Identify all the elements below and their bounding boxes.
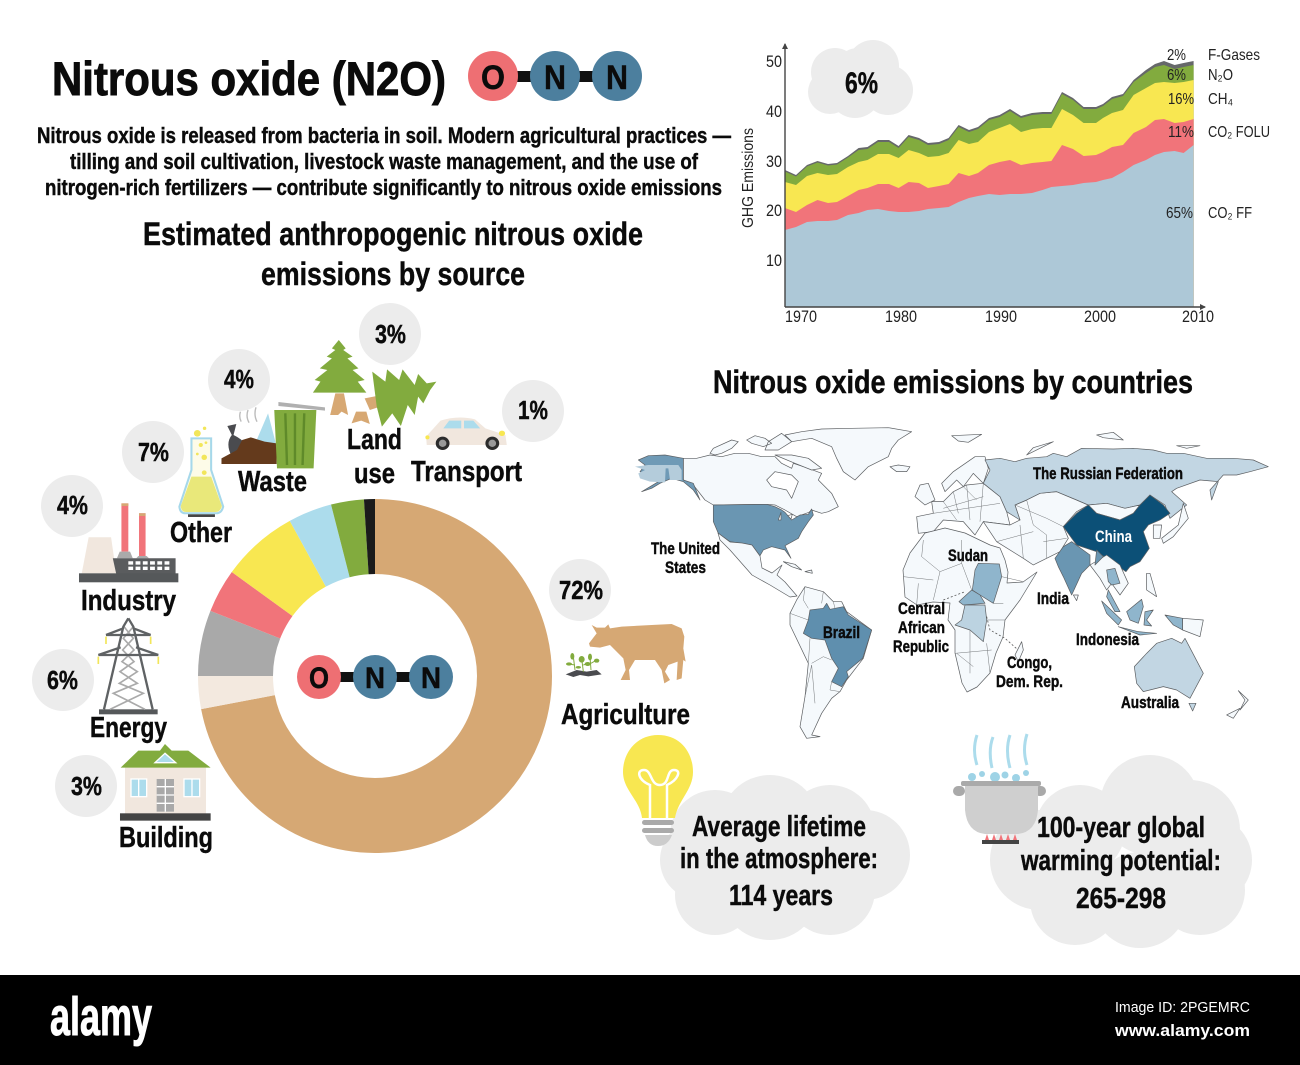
map: DR Congo xyxy=(955,605,987,642)
map labels: African xyxy=(898,618,945,637)
map: Hudson Bay xyxy=(767,472,798,498)
map labels: Brazil xyxy=(823,623,860,642)
map: Europe xyxy=(917,483,1010,535)
map: Philippines xyxy=(1147,573,1157,597)
intro text block xyxy=(37,123,731,200)
map: Thailand xyxy=(1107,568,1120,585)
icon: land use trees xyxy=(313,340,436,427)
map labels: Dem. Rep. xyxy=(996,672,1063,691)
area: CH4 xyxy=(785,80,1194,307)
footer stock bar: www.alamy.com xyxy=(1114,1021,1250,1040)
icon: factory xyxy=(79,503,178,582)
area: CO2 FF xyxy=(785,145,1194,307)
map labels: Congo, xyxy=(1007,653,1052,672)
percent badges: 4% xyxy=(224,364,254,394)
lifetime text: 114 years xyxy=(729,880,833,912)
y axis labels: 20 xyxy=(766,201,782,220)
map: China xyxy=(1063,495,1170,572)
icon: cow and sprout xyxy=(566,624,686,683)
series percentages: 16% xyxy=(1168,91,1194,108)
icon: car xyxy=(425,417,507,450)
category labels: Industry xyxy=(81,585,176,617)
heading: by countries: Nitrous oxide emissions by countries xyxy=(713,364,1193,400)
footer stock bar: alamy xyxy=(50,987,152,1047)
footer stock bar: Image ID: 2PGEMRC xyxy=(1115,999,1250,1016)
cloud shape xyxy=(990,755,1252,948)
icon: boiling pot xyxy=(953,734,1046,844)
x axis labels: 1990 xyxy=(985,307,1017,326)
map: Korea xyxy=(1153,525,1162,538)
map: Sudan xyxy=(972,563,1002,603)
map: Iceland xyxy=(890,465,910,472)
icon: N2O molecule header: N xyxy=(544,59,566,97)
series percentages: 65% xyxy=(1166,205,1193,222)
series percentages: 6% xyxy=(1167,67,1186,84)
percent badges: 6% xyxy=(47,665,78,695)
series labels xyxy=(1208,47,1270,222)
y axis title: GHG Emissions xyxy=(740,128,757,228)
map: watermark patch xyxy=(635,465,682,482)
percent badges: 72% xyxy=(559,575,603,605)
area: F-gases xyxy=(785,61,1194,307)
series percentages: 11% xyxy=(1168,124,1194,141)
lifetime text xyxy=(680,811,878,912)
map region: Eurasia xyxy=(915,432,1268,572)
map labels: Australia xyxy=(1121,693,1179,712)
series labels: CO₂ FF xyxy=(1208,205,1252,222)
warming potential text xyxy=(1020,812,1221,915)
icon: N2O molecule header xyxy=(468,51,642,101)
map: Brazil xyxy=(803,603,872,687)
map labels xyxy=(651,464,1183,712)
map labels: Republic xyxy=(893,637,949,656)
map region: Americas north xyxy=(635,428,912,573)
map: UK xyxy=(915,483,935,505)
icon: N2O molecule header: O xyxy=(481,59,505,97)
map: Svalbard and Arctic xyxy=(952,432,1200,455)
map region: Africa and Asia-Pacific xyxy=(903,540,1248,718)
map: Scandinavia xyxy=(942,457,988,492)
callout: 6% cloud: 6% xyxy=(845,67,878,100)
percent badges: 4% xyxy=(57,490,88,520)
map: Sri Lanka xyxy=(1073,595,1078,601)
map: New Zealand xyxy=(1227,691,1248,718)
map: South East Asia xyxy=(1090,555,1128,595)
icon: building xyxy=(120,744,211,821)
x axis labels xyxy=(785,307,1214,326)
category labels: Building xyxy=(119,822,213,854)
panel: warming potential cloud xyxy=(953,734,1252,948)
map: Arctic islands xyxy=(710,433,822,470)
y axis labels xyxy=(766,52,782,270)
area: CO2 FOLU xyxy=(785,119,1194,307)
series labels: F-Gases xyxy=(1208,47,1260,64)
map: Papua New Guinea xyxy=(1183,618,1203,637)
map labels: India xyxy=(1037,589,1069,608)
category labels: Land xyxy=(347,424,402,456)
warming potential text: 100-year global xyxy=(1037,812,1205,844)
lifetime text: in the atmosphere: xyxy=(680,843,878,875)
percent badges: 3% xyxy=(375,319,406,349)
warming potential text: warming potential: xyxy=(1020,845,1221,877)
y axis labels: 10 xyxy=(766,251,782,270)
map: Mexico and Central America xyxy=(718,533,797,597)
y axis labels: 40 xyxy=(766,102,782,121)
map: Cuba and Caribbean xyxy=(783,562,812,573)
x axis labels: 1970 xyxy=(785,307,817,326)
icon: N2O molecule in donut: O xyxy=(309,662,329,695)
map: Russia xyxy=(983,448,1268,520)
map labels: Central xyxy=(898,599,945,618)
map: Canada xyxy=(683,453,838,517)
map region: South America xyxy=(790,587,872,738)
world map xyxy=(635,428,1268,738)
x axis labels: 2010 xyxy=(1182,307,1214,326)
series labels: N₂O xyxy=(1208,67,1233,84)
map: Australia xyxy=(1134,638,1203,711)
category labels: Agriculture xyxy=(561,699,690,731)
map labels: States xyxy=(665,558,706,577)
percent badges: 1% xyxy=(518,395,548,425)
category labels: Waste xyxy=(238,466,307,498)
map: Great Lakes xyxy=(778,512,792,520)
map: Greenland xyxy=(785,428,912,480)
icon: N2O molecule in donut: N xyxy=(365,662,385,695)
donut chart xyxy=(236,536,514,816)
icon: N2O molecule in donut: N xyxy=(421,662,441,695)
heading: emissions by source: emissions by source xyxy=(261,256,525,292)
category labels: Energy xyxy=(90,712,167,744)
map: India xyxy=(1055,542,1103,595)
category labels: Transport xyxy=(411,456,522,488)
intro text block: tilling and soil cultivation, livestock waste management, and the use of xyxy=(70,149,699,174)
title: Nitrous oxide (N2O) xyxy=(52,52,446,105)
map: Africa xyxy=(903,528,1037,692)
footer stock bar xyxy=(0,975,1300,1065)
category labels: Other xyxy=(170,517,232,549)
icon: N2O molecule header: N xyxy=(606,59,628,97)
percent badges xyxy=(32,303,611,817)
map labels: Sudan xyxy=(948,546,988,565)
icon: flask xyxy=(179,427,223,517)
heading: emissions by source: Estimated anthropogenic nitrous oxide xyxy=(143,216,643,252)
heading: emissions by source xyxy=(143,216,643,292)
warming potential text: 265-298 xyxy=(1076,883,1166,915)
intro text block: nitrogen-rich fertilizers — contribute significantly to nitrous oxide emissions xyxy=(45,175,722,200)
series labels: CH₄ xyxy=(1208,91,1233,108)
icon: light bulb xyxy=(623,735,693,846)
category labels: use xyxy=(354,458,395,490)
map: Japan xyxy=(1162,503,1188,543)
map: Mongolia xyxy=(1088,503,1140,520)
cloud shape xyxy=(660,775,910,940)
map: Central Asia and Middle East xyxy=(983,492,1088,565)
icon: waste bin and bag xyxy=(221,402,325,468)
panel: lifetime cloud xyxy=(623,735,910,940)
axes xyxy=(782,43,1206,310)
callout: 6% cloud xyxy=(808,40,913,118)
map labels: The Russian Federation xyxy=(1033,464,1183,483)
map: Central African Republic xyxy=(959,590,985,605)
icon: N2O molecule in donut xyxy=(297,655,453,699)
lifetime text: Average lifetime xyxy=(692,811,866,843)
percent badges: 3% xyxy=(71,771,102,801)
map: Indonesia and Malaysia xyxy=(1102,590,1183,635)
map: South America xyxy=(790,587,872,738)
intro text block: Nitrous oxide is released from bacteria in soil. Modern agricultural practices — xyxy=(37,123,731,148)
series percentages: 2% xyxy=(1167,47,1186,64)
percent badges: 7% xyxy=(138,437,169,467)
map labels: China xyxy=(1095,527,1132,546)
panel: GHG stacked area chart xyxy=(740,43,1270,326)
map: Alaska xyxy=(638,455,700,500)
icon: power tower xyxy=(98,618,158,714)
y axis labels: 50 xyxy=(766,52,782,71)
x axis labels: 2000 xyxy=(1084,307,1116,326)
x axis labels: 1980 xyxy=(885,307,917,326)
series labels: CO₂ FOLU xyxy=(1208,124,1270,141)
map: USA xyxy=(713,504,813,558)
map: Madagascar xyxy=(1015,642,1023,662)
series percentages xyxy=(1166,47,1194,222)
map labels: The United xyxy=(651,539,720,558)
area: N2O xyxy=(785,65,1194,307)
y axis labels: 30 xyxy=(766,152,782,171)
category labels xyxy=(81,424,690,854)
map labels: Indonesia xyxy=(1076,630,1139,649)
